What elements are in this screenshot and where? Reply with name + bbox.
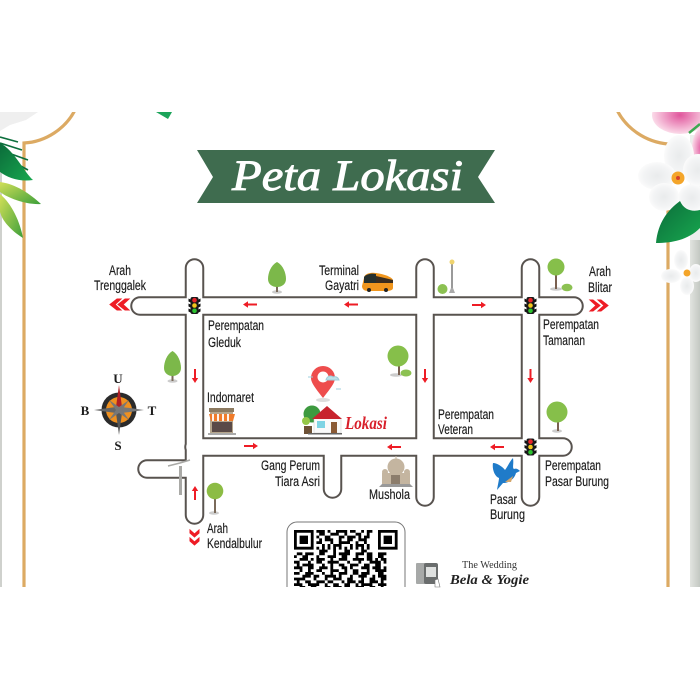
labels: Blitar (588, 280, 612, 295)
traffic light: Tamanan (524, 297, 536, 314)
traffic light: Gleduk (188, 297, 200, 314)
chevron: to Blitar (590, 300, 608, 311)
labels: Pasar Burung (545, 474, 609, 489)
labels: Perempatan (545, 458, 601, 473)
infographic canvas (0, 112, 700, 588)
road map (81, 258, 612, 551)
icon: phone scanning QR (416, 563, 440, 587)
labels: Burung (490, 507, 525, 522)
labels: Indomaret (207, 390, 254, 405)
icon: location pin (308, 366, 341, 402)
labels: Arah (207, 521, 228, 536)
wedding credit: The Wedding (462, 560, 518, 571)
title text: Peta Lokasi (231, 153, 463, 200)
green right leaf (656, 201, 700, 243)
labels: Kendalbulur (207, 536, 262, 551)
labels: Gang Perum (261, 458, 320, 473)
labels (94, 263, 612, 551)
compass letters: T (148, 403, 157, 418)
chevron: to Kendalbulur (190, 530, 199, 545)
compass (81, 371, 157, 453)
QR code (294, 530, 398, 587)
icon: bus (362, 273, 393, 292)
labels: Gleduk (208, 335, 241, 350)
title banner (197, 150, 495, 203)
top leaf fragment (156, 112, 172, 119)
left grey pillar (0, 112, 38, 587)
icon: conifer tree top road (268, 262, 286, 294)
icon: lamp post and bush (438, 260, 455, 294)
labels: Tiara Asri (275, 474, 320, 489)
location label: Lokasi (344, 413, 387, 433)
compass letters: B (81, 403, 90, 418)
labels: Pasar (490, 492, 517, 507)
labels: Veteran (438, 422, 473, 437)
icon: round tree top right (548, 258, 572, 291)
compass letters: S (114, 438, 122, 453)
icon: tree in block (388, 346, 412, 377)
traffic light: Pasar Burung (524, 438, 536, 456)
compass letters: U (113, 371, 123, 386)
wedding credit (449, 560, 529, 588)
small white flower (661, 250, 700, 295)
right gold arch (617, 110, 668, 587)
QR code panel (286, 522, 406, 587)
direction arrows (192, 301, 534, 500)
icon: street lamp (168, 460, 190, 495)
labels: Arah (109, 263, 131, 278)
compass letters (81, 371, 157, 453)
wedding credit: Bela & Yogie (449, 573, 529, 588)
labels: Arah (589, 264, 611, 279)
left leaves (0, 137, 41, 238)
labels: Terminal (319, 263, 359, 278)
icon: conifer tree left road (164, 351, 181, 383)
icon: blue bird (493, 458, 520, 490)
chevron: to Trenggalek (110, 299, 129, 310)
icon: house (302, 406, 342, 434)
labels: Gayatri (325, 278, 359, 293)
labels: Perempatan (543, 317, 599, 332)
road network (140, 268, 574, 515)
decorative frame and floral background (0, 96, 700, 587)
labels: Perempatan (208, 318, 264, 333)
icon: tree near Kendalbulur (207, 483, 223, 515)
labels: Perempatan (438, 407, 494, 422)
icon: mosque (379, 456, 413, 487)
labels: Tamanan (543, 333, 585, 348)
icon: store (208, 408, 236, 435)
labels: Mushola (369, 487, 410, 502)
large white flower (638, 135, 700, 212)
pink blossom (652, 112, 700, 154)
left gold arch (24, 110, 75, 587)
icon: tree right of road (546, 402, 568, 433)
labels: Trenggalek (94, 278, 146, 293)
right grey pillar (690, 135, 700, 587)
